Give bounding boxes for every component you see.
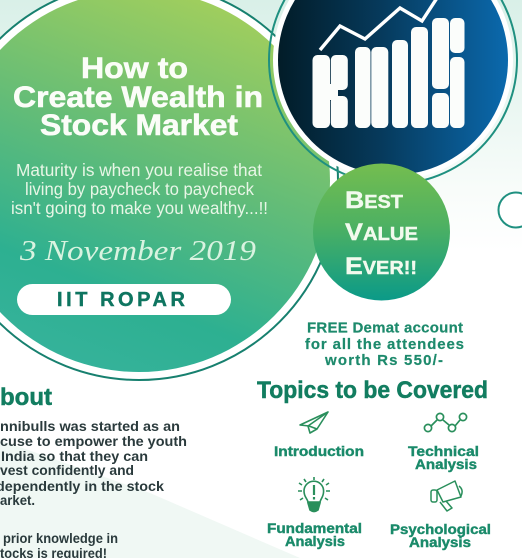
topic: fundamental analysis: Fundamental xyxy=(267,521,362,536)
about body text: cuse to empower the youth xyxy=(0,433,187,449)
topic: technical analysis: Technical xyxy=(408,444,479,459)
icon: paper plane xyxy=(300,412,328,433)
about body text: arket. xyxy=(0,492,35,508)
title: How to xyxy=(81,52,188,85)
icon: megaphone xyxy=(431,481,462,511)
venue pill xyxy=(17,284,231,315)
tagline: Maturity is when you realise that xyxy=(16,160,262,180)
about body text: prior knowledge in xyxy=(3,530,118,546)
title: Stock Market xyxy=(40,109,238,142)
heading: about: bout xyxy=(0,384,52,411)
about body text xyxy=(0,418,187,558)
free demat offer: for all the attendees xyxy=(305,336,464,353)
topic: psychological analysis: Psychological xyxy=(390,522,491,537)
topic: psychological analysis: Analysis xyxy=(409,535,471,550)
tagline xyxy=(11,160,268,218)
title xyxy=(13,52,263,142)
badge: best value ever: BEST xyxy=(345,187,403,214)
topic: technical analysis xyxy=(408,444,479,472)
decorative ring right xyxy=(498,192,522,228)
about body text: nnibulls was started as an xyxy=(0,418,180,434)
tagline: living by paycheck to paycheck xyxy=(25,179,254,199)
heading: topics: Topics to be Covered xyxy=(257,377,488,404)
about body text: vest confidently and xyxy=(0,462,134,478)
date: 3 November 2019 xyxy=(19,235,257,267)
about body text: dependently in the stock xyxy=(0,478,164,494)
badge: best value ever xyxy=(313,164,450,300)
free demat offer xyxy=(305,320,464,369)
icon: light bulb xyxy=(298,477,330,512)
title: Create Wealth in xyxy=(13,81,263,114)
panel: event hero circle xyxy=(0,0,338,380)
free demat offer: worth Rs 550/- xyxy=(324,352,443,369)
icon: rising chart line xyxy=(320,0,437,50)
icon: bulls letter bars xyxy=(312,18,464,128)
tagline: isn't going to make you wealthy...!! xyxy=(11,198,268,218)
topic: introduction: Introduction xyxy=(274,444,364,459)
venue pill: IIT ROPAR xyxy=(57,289,186,311)
topic: fundamental analysis: Analysis xyxy=(285,534,345,549)
badge: best value ever: VALUE xyxy=(345,219,418,246)
icon: network graph xyxy=(424,413,467,432)
topic: psychological analysis xyxy=(390,522,491,550)
free demat offer: FREE Demat account xyxy=(307,320,463,336)
about body text: India so that they can xyxy=(1,448,148,464)
badge: best value ever: EVER!! xyxy=(345,253,417,280)
topic: technical analysis: Analysis xyxy=(415,457,477,472)
logo circle xyxy=(269,0,517,184)
topic: fundamental analysis xyxy=(267,521,362,549)
